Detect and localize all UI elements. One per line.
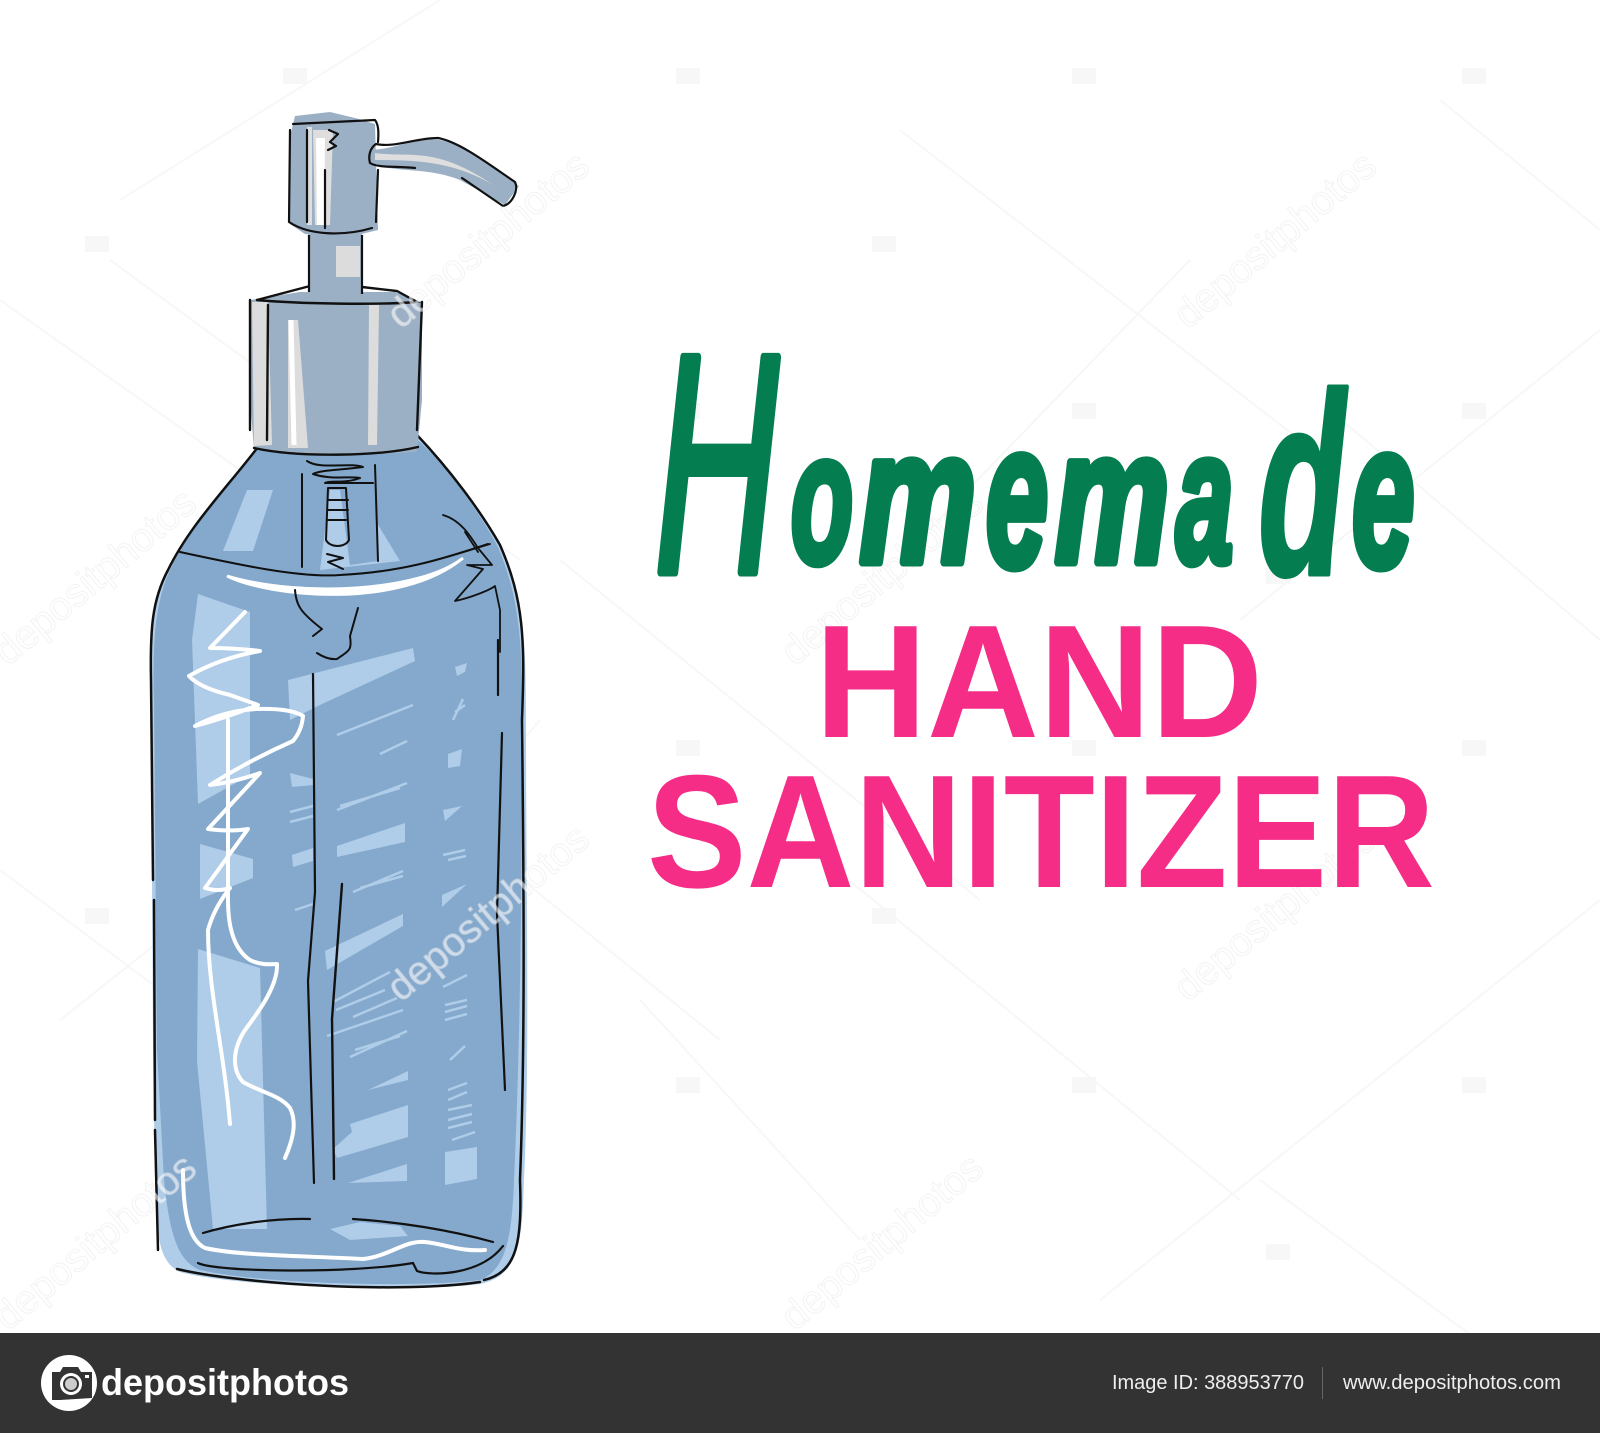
bottle body xyxy=(150,435,527,1288)
pump stem xyxy=(308,232,362,294)
watermarks: depositphotos xyxy=(379,143,598,337)
website url: www.depositphotos.com xyxy=(1342,1372,1561,1394)
watermarks xyxy=(0,143,1385,1339)
light streaks xyxy=(290,699,475,1140)
watermarks: depositphotos xyxy=(773,1145,992,1339)
title: Homemade: H xyxy=(655,291,779,639)
pump spout xyxy=(369,138,519,206)
watermarks: depositphotos xyxy=(379,816,598,1010)
watermarks: depositphotos xyxy=(773,480,992,674)
title: Homemade: a xyxy=(1176,393,1233,603)
pump collar xyxy=(250,286,422,456)
bottle ink outline xyxy=(151,435,524,1287)
bottle illustration xyxy=(150,112,527,1288)
logo wordmark: depositphotos xyxy=(101,1362,349,1403)
title: Homemade: e xyxy=(986,381,1048,611)
title: Homemade: m xyxy=(860,393,976,603)
title: Homemade: d xyxy=(1258,342,1348,630)
title: Homemade: o xyxy=(791,395,853,602)
watermarks: depositphotos xyxy=(1166,143,1385,337)
title: Homemade: m xyxy=(1055,393,1169,603)
white squiggle reflection xyxy=(189,612,303,1158)
title: HAND: HAND xyxy=(815,592,1263,772)
icon: camera logo xyxy=(41,1355,97,1411)
footer bar xyxy=(0,1333,1600,1433)
watermarks: depositphotos xyxy=(1166,816,1385,1010)
title: SANITIZER: SANITIZER xyxy=(647,742,1435,922)
image id: Image ID: 388953770 xyxy=(1112,1372,1304,1394)
white base reflection xyxy=(183,1170,485,1259)
title: Homemade: e xyxy=(1352,381,1415,611)
pump head xyxy=(289,112,378,238)
